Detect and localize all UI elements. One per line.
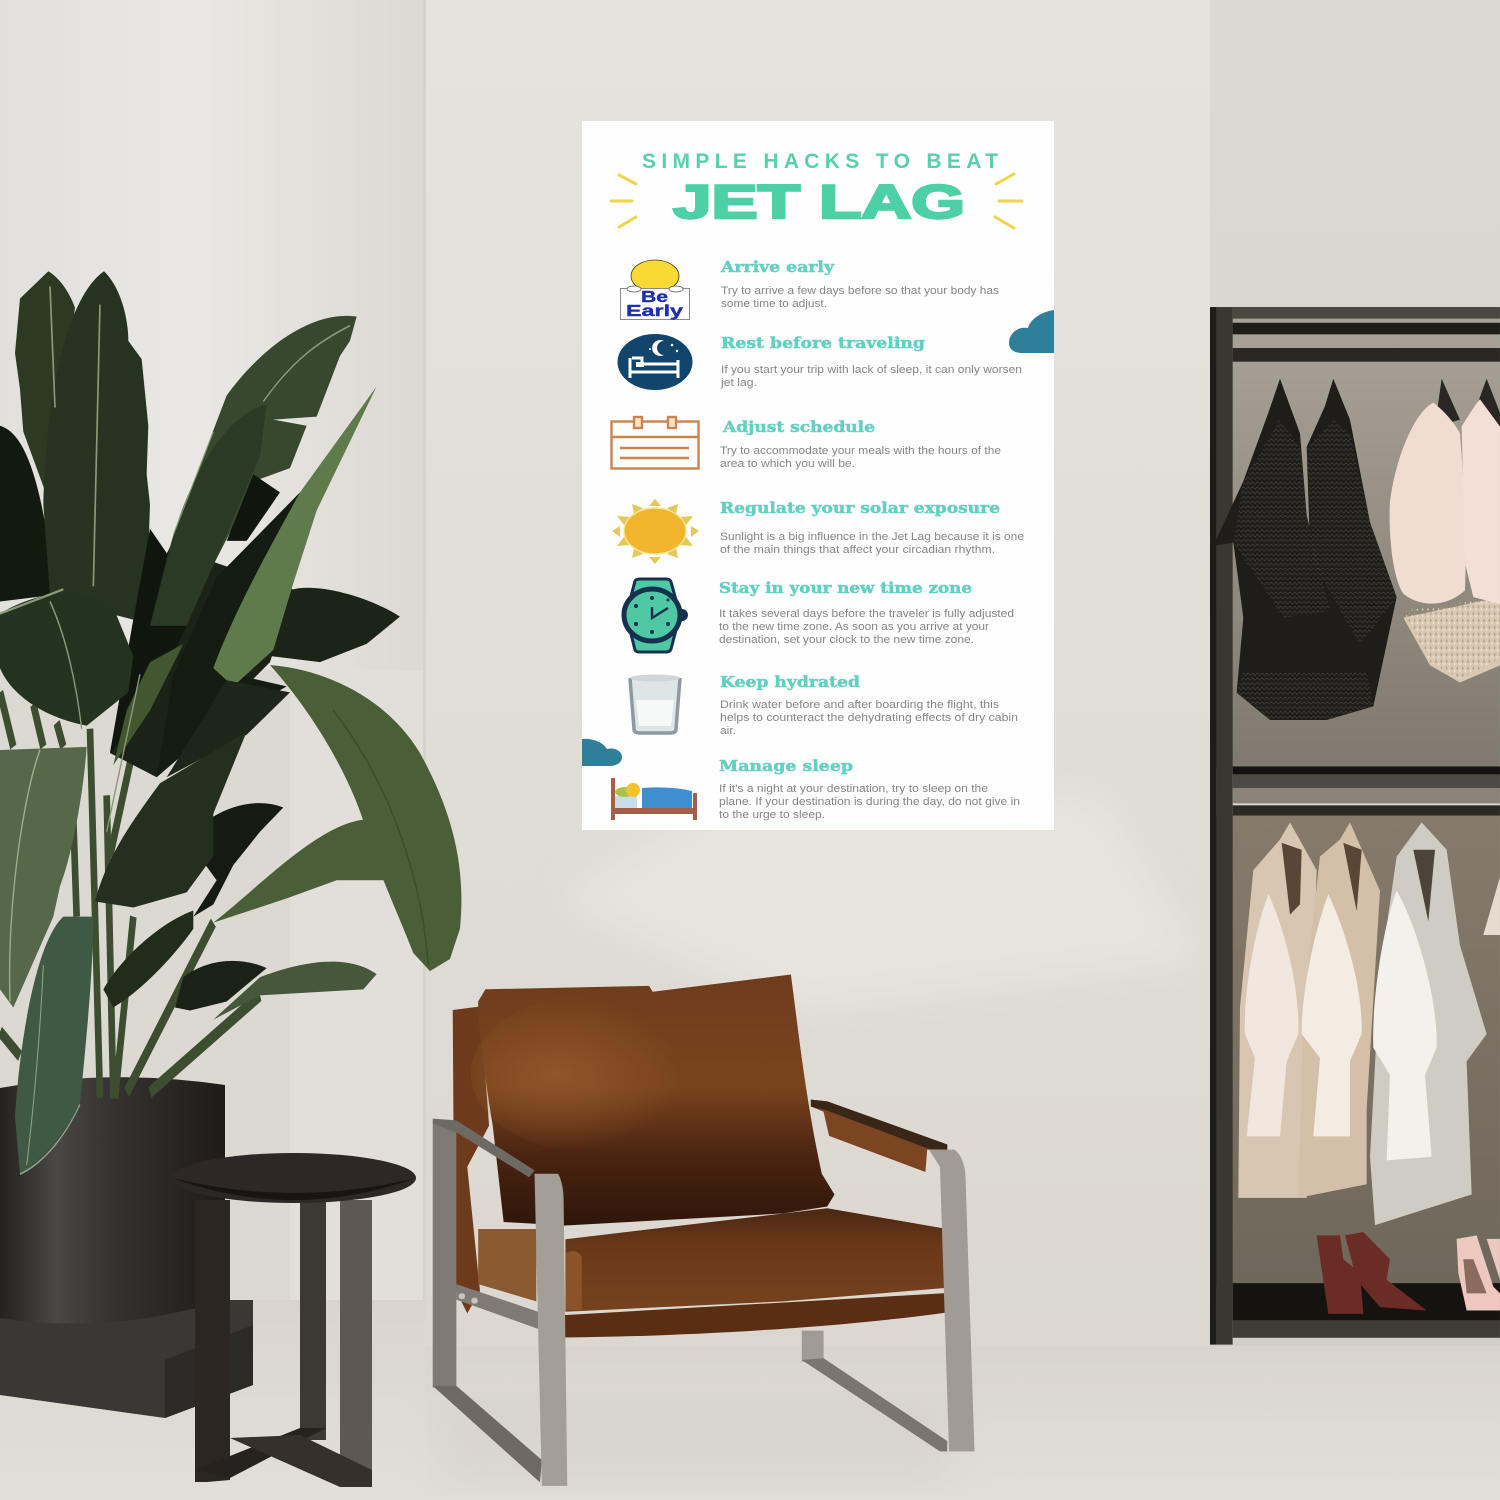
- pink heels: [1457, 1235, 1500, 1310]
- black lace garments: [1213, 379, 1397, 720]
- text: jet lag.: [720, 377, 757, 389]
- chair front steel leg: [535, 1174, 567, 1486]
- tip: rest before traveling: [618, 334, 1022, 390]
- text: air.: [720, 725, 736, 737]
- tip: stay in new time zone: [624, 579, 1014, 652]
- heading: Rest before traveling: [721, 334, 926, 352]
- icon: wristwatch: [624, 579, 688, 652]
- text: Drink water before and after boarding the flight, this: [720, 699, 1000, 711]
- text: [720, 364, 1022, 389]
- chair right rear leg: [802, 1331, 824, 1362]
- heading: Stay in your new time zone: [719, 579, 972, 597]
- rack back panels: [1210, 307, 1500, 1287]
- chair bolted bar: [456, 1284, 538, 1329]
- text: plane. If your destination is during the day, do not give in: [719, 796, 1020, 808]
- heading: Keep hydrated: [720, 673, 861, 691]
- rack frame and shelves: [1210, 307, 1500, 1345]
- side table: [172, 1153, 416, 1487]
- icon: glass of water: [630, 674, 680, 733]
- heading: Adjust schedule: [722, 418, 875, 436]
- text: to the new time zone. As soon as you arrive at your: [719, 621, 989, 633]
- text: [720, 699, 1018, 737]
- blush blouses: [1390, 379, 1500, 682]
- plant pot: [0, 1077, 225, 1324]
- tip: adjust schedule: [611, 417, 1001, 470]
- text: [720, 445, 1001, 470]
- text: area to which you will be.: [720, 458, 855, 470]
- text: Try to arrive a few days before so that your body has: [721, 285, 1000, 297]
- text: [721, 285, 1000, 310]
- chair side panel: [478, 1229, 536, 1301]
- cream robes: [1238, 822, 1500, 1225]
- text: some time to adjust.: [721, 298, 827, 310]
- poster title: SIMPLE HACKS TO BEAT: [642, 150, 998, 173]
- poster sheet: [582, 121, 1054, 830]
- red boots: [1317, 1232, 1427, 1314]
- heading: Regulate your solar exposure: [720, 499, 1000, 517]
- chair left base bar: [433, 1386, 542, 1482]
- plant block base: [0, 1300, 253, 1418]
- poster: [582, 121, 1054, 830]
- cloud bottom left: [582, 739, 622, 766]
- tip: arrive early: [620, 258, 1000, 320]
- text: helps to counteract the dehydrating effects of dry cabin: [720, 712, 1018, 724]
- icon: be early sign: Early: [626, 303, 683, 320]
- text: If you start your trip with lack of sleep, it can only worsen: [721, 364, 1022, 376]
- plant leaves: [0, 271, 461, 1174]
- text: [720, 531, 1024, 556]
- text: [719, 608, 1014, 646]
- chair back cushion: [471, 974, 835, 1225]
- chair right base bar: [802, 1358, 947, 1451]
- potted plant: [0, 271, 461, 1418]
- chair lower seat strip: [564, 1293, 953, 1338]
- icon: be early sign: Be: [641, 289, 668, 306]
- chair rear frame: [453, 1007, 489, 1313]
- heading: Manage sleep: [719, 757, 853, 775]
- leather armchair: [433, 974, 974, 1486]
- text: destination, set your clock to the new time zone.: [719, 634, 974, 646]
- chair left arm: [433, 1119, 535, 1177]
- tip: regulate solar exposure: [612, 499, 1024, 564]
- poster title: JET LAG: [673, 175, 965, 228]
- chair left rear steel post: [433, 1122, 456, 1388]
- text: Try to accommodate your meals with the hours of the: [720, 445, 1001, 457]
- text: If it's a night at your destination, try to sleep on the: [719, 783, 988, 795]
- poster title: [642, 150, 998, 228]
- text: Sunlight is a big influence in the Jet Lag because it is one: [720, 531, 1024, 543]
- chair right steel leg: [929, 1150, 974, 1451]
- chair seat cushion: [565, 1208, 951, 1312]
- tip: keep hydrated: [630, 673, 1018, 737]
- icon: be early sign: [620, 260, 690, 320]
- cloud top right: [1009, 310, 1054, 353]
- icon: sun: [612, 499, 699, 564]
- chair right arm pad: [811, 1100, 947, 1172]
- text: to the urge to sleep.: [719, 809, 825, 821]
- tip: manage sleep: [611, 757, 1020, 821]
- text: of the main things that affect your circadian rhythm.: [720, 544, 995, 556]
- text: It takes several days before the traveler is fully adjusted: [719, 608, 1014, 620]
- text: [719, 783, 1020, 821]
- clothing rack: [1210, 307, 1500, 1345]
- icon: calendar: [611, 417, 699, 468]
- decorative yellow rays: [611, 174, 1022, 228]
- heading: Arrive early: [720, 258, 835, 276]
- icon: person in bed: [611, 778, 697, 820]
- icon: bed at night: [618, 334, 692, 390]
